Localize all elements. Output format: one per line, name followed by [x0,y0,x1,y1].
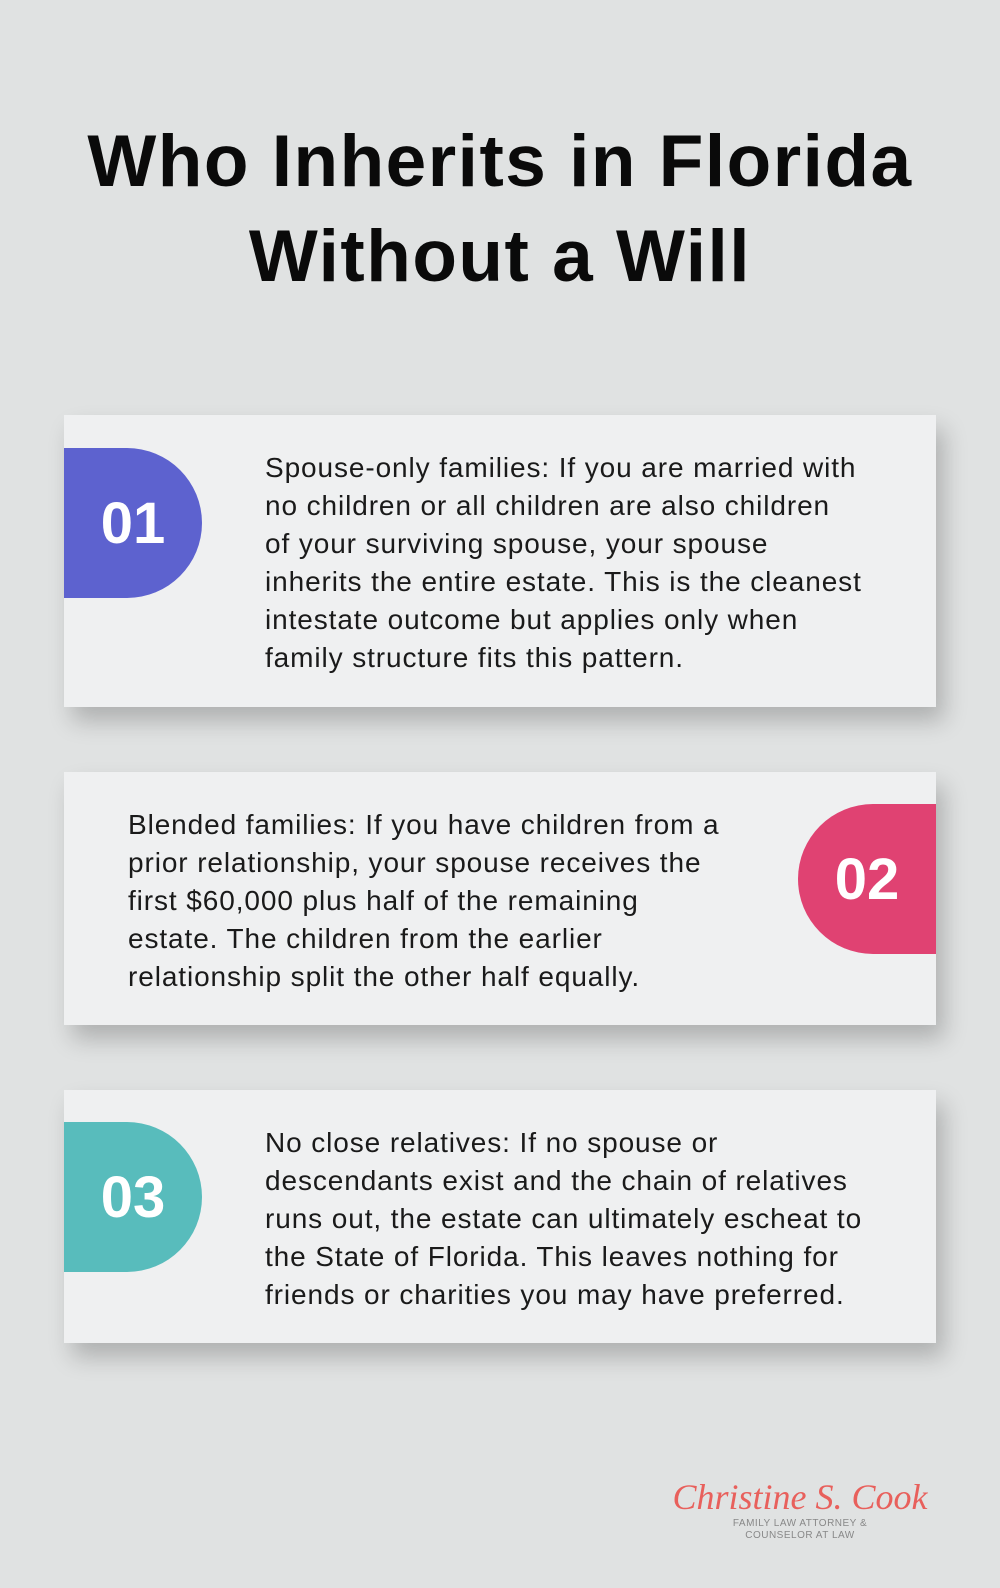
text 02: estate. The children from the earlier [128,923,603,954]
panel: card 01 [64,415,936,707]
logo [672,1477,928,1541]
title: Who Inherits in Florida [87,121,913,202]
text 02: prior relationship, your spouse receives the [128,847,701,878]
text 01: Spouse-only families: If you are married with [265,452,856,483]
text 02 [128,809,719,992]
text 01: family structure fits this pattern. [265,642,684,673]
badge 03 [64,1122,202,1272]
text 01: no children or all children are also children [265,490,830,521]
text 03: No close relatives: If no spouse or [265,1127,718,1158]
title [87,121,913,297]
title: Without a Will [249,216,751,297]
text 03: the State of Florida. This leaves nothing for [265,1241,839,1272]
badge 02 [798,804,936,954]
text 01: of your surviving spouse, your spouse [265,528,768,559]
text 03 [265,1127,862,1310]
text 01 [265,452,862,673]
badge 01: 01 [101,490,165,556]
logo: FAMILY LAW ATTORNEY & [733,1518,867,1529]
text 01: intestate outcome but applies only when [265,604,798,635]
panel: card 03 [64,1090,936,1343]
panel: card 02 [64,772,936,1025]
badge 02: 02 [835,846,899,912]
text 03: friends or charities you may have preferred. [265,1279,845,1310]
text 02: Blended families: If you have children from a [128,809,719,840]
badge 01 [64,448,202,598]
text 01: inherits the entire estate. This is the cleanest [265,566,862,597]
text 03: runs out, the estate can ultimately escheat to [265,1203,862,1234]
badge 03: 03 [101,1164,165,1230]
logo: COUNSELOR AT LAW [745,1530,855,1541]
logo: Christine S. Cook [672,1477,928,1517]
text 02: first $60,000 plus half of the remaining [128,885,639,916]
text 02: relationship split the other half equally. [128,961,640,992]
text 03: descendants exist and the chain of relatives [265,1165,848,1196]
